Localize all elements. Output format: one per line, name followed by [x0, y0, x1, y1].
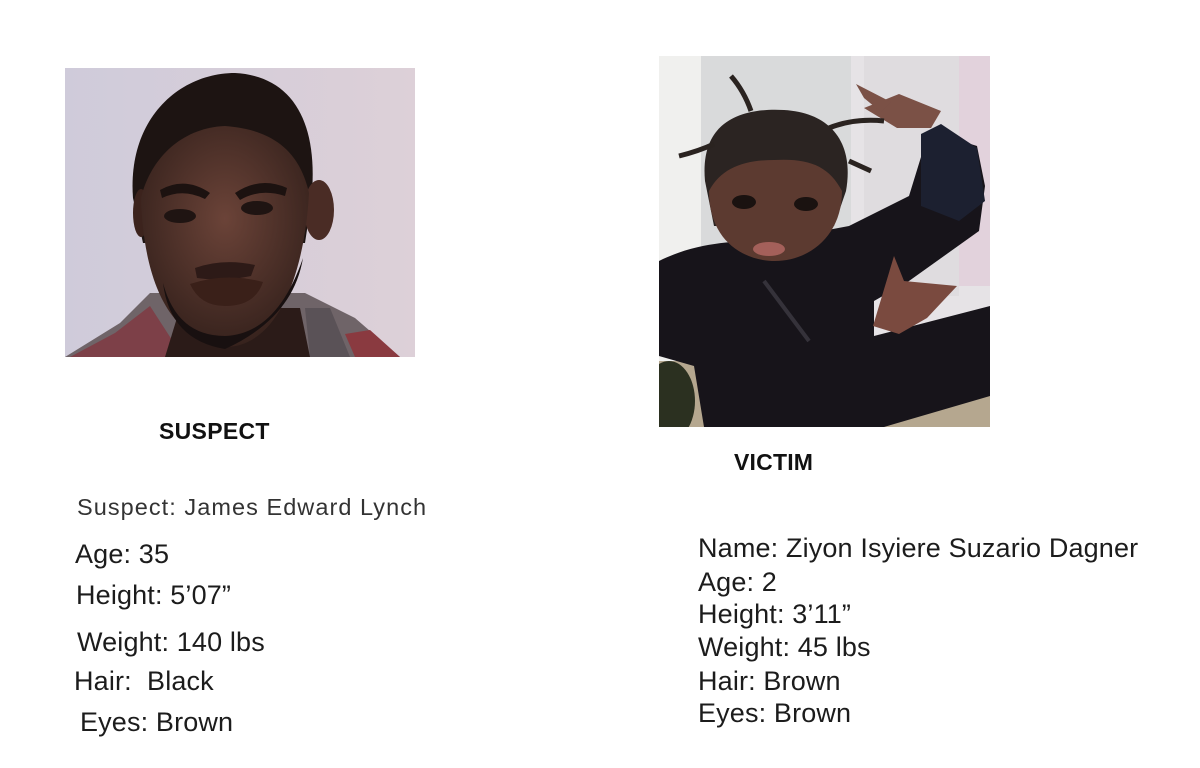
photo: suspect portrait	[65, 68, 415, 357]
victim hair: Hair: Brown	[698, 666, 841, 696]
victim weight: Weight: 45 lbs	[698, 632, 871, 662]
suspect eyes: Eyes: Brown	[80, 707, 233, 737]
text block: victim details	[698, 533, 1138, 728]
suspect name: Suspect: James Edward Lynch	[77, 494, 427, 520]
victim height: Height: 3’11”	[698, 599, 851, 629]
suspect hair: Hair: Black	[74, 666, 214, 696]
victim name: Name: Ziyon Isyiere Suzario Dagner	[698, 533, 1138, 563]
photo: victim portrait	[659, 56, 990, 427]
heading: victim: VICTIM	[734, 449, 813, 475]
suspect weight: Weight: 140 lbs	[77, 627, 265, 657]
text block: suspect details	[74, 494, 427, 737]
heading: suspect: SUSPECT	[159, 418, 270, 444]
victim age: Age: 2	[698, 567, 777, 597]
suspect age: Age: 35	[75, 539, 169, 569]
victim eyes: Eyes: Brown	[698, 698, 851, 728]
suspect height: Height: 5’07”	[76, 580, 231, 610]
